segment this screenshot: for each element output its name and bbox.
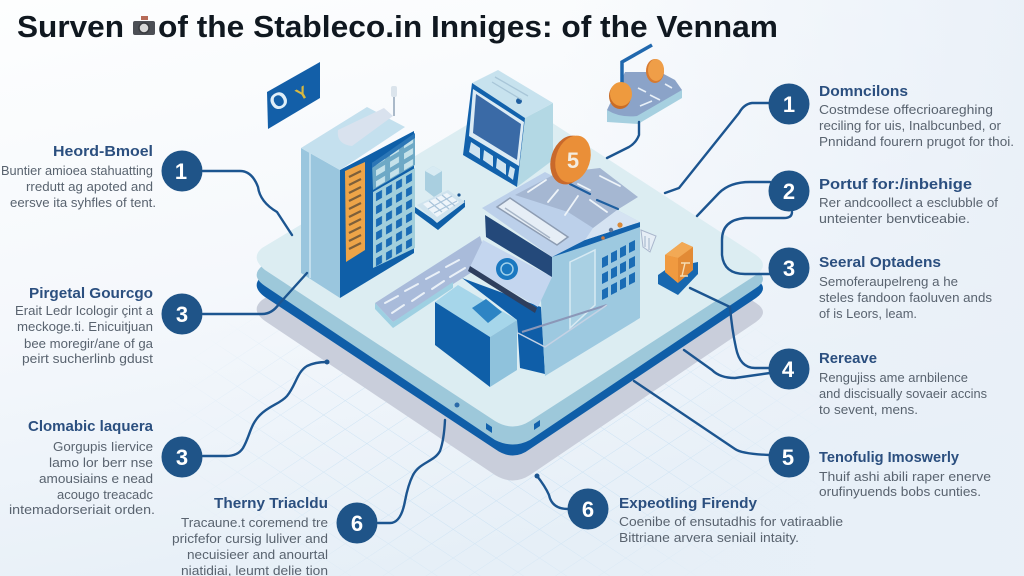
number badge 3	[162, 436, 202, 478]
callout left: Clomabic laquera: intemadorseriait orden.	[9, 503, 155, 517]
callout right: Portuf for:/inbehige: Rer andcoollect a esclubble of	[819, 196, 999, 210]
callout right: Domncilons: Pnnidand fourern prugot for thoi.	[819, 135, 1014, 149]
callout right: Portuf for:/inbehige: Portuf for:/inbehige	[819, 176, 972, 193]
callout right: Rereave	[768, 348, 987, 417]
callout left: Clomabic laquera: acougo treacadc	[57, 488, 153, 502]
callout right: Tenofulig Imoswerly	[768, 436, 991, 499]
callout bottom: Therny Triacldu: pricfefor cursig luliver and	[172, 532, 328, 546]
icon: orange coin	[544, 131, 597, 189]
sign board	[264, 62, 320, 129]
number badge 5: 5	[782, 445, 794, 470]
callout right: Tenofulig Imoswerly: orufinyuends bobs cunties.	[819, 485, 981, 499]
callout right: Rereave: Rereave	[819, 350, 877, 367]
callout left: Pirgetal Gourcgo: Erait Ledr Icologir çint a	[15, 304, 153, 318]
sign board: Y	[292, 82, 312, 104]
number badge 6	[568, 488, 608, 530]
callout bottom: Expeotling Firendy	[568, 488, 843, 545]
callout left: Clomabic laquera	[9, 418, 202, 517]
central machine	[462, 168, 656, 376]
callout left: Pirgetal Gourcgo	[15, 285, 202, 366]
keypad terminal	[415, 166, 465, 230]
orange label	[345, 162, 365, 262]
callout left: Heord-Bmoel: Heord-Bmoel	[53, 143, 153, 160]
callout bottom: Therny Triacldu: Therny Triacldu	[214, 495, 328, 512]
number badge 1	[768, 84, 810, 124]
number badge 4	[768, 348, 810, 390]
callout bottom: Therny Triacldu: necuisieer and anourtal	[187, 548, 328, 562]
icon: coin scale	[607, 45, 682, 124]
callout left: Clomabic laquera: lamo lor berr nse	[49, 456, 153, 470]
callout right: Domncilons	[768, 83, 1014, 149]
number badge 1: 1	[175, 159, 187, 184]
callout right: Seeral Optadens: Seeral Optadens	[819, 254, 941, 271]
callout right: Domncilons: Costmdese offecrioareghing	[819, 103, 993, 117]
callout left: Heord-Bmoel	[1, 143, 202, 210]
title: Surven	[17, 9, 124, 44]
callout left: Clomabic laquera: amousiains e nead	[39, 472, 153, 486]
callout right: Tenofulig Imoswerly: Thuif ashi abili raper enerve	[819, 470, 991, 484]
hanging clip	[641, 230, 656, 252]
number badge 5	[768, 436, 810, 478]
callout right: Seeral Optadens: steles fandoon faoluven ands	[819, 291, 992, 305]
isometric platform	[257, 100, 763, 480]
number badge 3: 3	[176, 445, 188, 470]
tower building	[301, 86, 415, 298]
number badge 1: 1	[783, 92, 795, 117]
drawer box	[435, 285, 517, 387]
number badge 2	[768, 170, 810, 212]
number badge 3	[162, 294, 202, 334]
callout left: Pirgetal Gourcgo: meckoge.ti. Enicuitjuan	[17, 320, 153, 334]
number badge 6: 6	[351, 511, 363, 536]
callout right: Seeral Optadens	[768, 248, 992, 321]
callout left: Clomabic laquera: Clomabic laquera	[28, 418, 154, 435]
callout left: Heord-Bmoel: eersve ita syhfles of tent.	[10, 196, 156, 210]
callout right: Tenofulig Imoswerly: Tenofulig Imoswerly	[819, 449, 960, 466]
control panel	[552, 210, 640, 257]
callout left: Heord-Bmoel: Buntier amioea stahuatting	[1, 164, 153, 178]
callout bottom: Expeotling Firendy: Coenibe of ensutadhis for vatiraablie	[619, 515, 843, 529]
callout right: Portuf for:/inbehige	[768, 170, 999, 226]
icon: orange coin: 5	[567, 148, 579, 173]
callout right: Rereave: and discisually sovaeir accins	[819, 387, 987, 401]
callout bottom: Expeotling Firendy: Bittriane arvera seniail intaity.	[619, 531, 799, 545]
number badge 3: 3	[783, 256, 795, 281]
callout right: Seeral Optadens: of is Leors, leam.	[819, 307, 917, 321]
callout left: Pirgetal Gourcgo: peirt sucherlinb gdust	[22, 352, 154, 366]
window grid	[372, 133, 415, 268]
monitor	[463, 70, 553, 187]
conveyor belt	[375, 236, 488, 328]
output tray	[497, 198, 568, 245]
callout bottom: Therny Triacldu: Tracaune.t coremend tre	[181, 516, 328, 530]
callout bottom: Expeotling Firendy: Expeotling Firendy	[619, 495, 758, 512]
callout right: Seeral Optadens: Semoferaupelreng a he	[819, 275, 958, 289]
callout right: Rereave: to sevent, mens.	[819, 403, 918, 417]
callout bottom: Therny Triacldu	[172, 495, 378, 576]
callout left: Heord-Bmoel: rredutt ag apoted and	[26, 180, 153, 194]
number badge 2: 2	[783, 179, 795, 204]
number badge 1	[162, 150, 202, 192]
number badge 3	[768, 248, 810, 288]
callout right: Domncilons: Domncilons	[819, 83, 908, 100]
sign board: O	[264, 85, 293, 116]
callout right: Portuf for:/inbehige: unteienter benvticeabie.	[819, 212, 970, 226]
title: of the Stableco.in Inniges: of the Vennam	[158, 9, 778, 44]
number badge 6: 6	[582, 497, 594, 522]
number badge 6	[336, 502, 378, 544]
number badge 3: 3	[176, 302, 188, 327]
callout right: Rereave: Rengujiss ame arnbilence	[819, 371, 968, 385]
paper sheet	[515, 168, 638, 228]
number badge 4: 4	[782, 357, 795, 382]
platform ports	[454, 402, 540, 433]
connector lines	[203, 103, 792, 523]
icon: orange cube	[658, 242, 698, 295]
icon: title glyph	[133, 16, 155, 35]
callout right: Domncilons: reciling for uis, Inalbcunbed, or	[819, 119, 1001, 133]
callout left: Pirgetal Gourcgo: Pirgetal Gourcgo	[29, 285, 153, 302]
callout left: Clomabic laquera: Gorgupis Iiervice	[53, 440, 153, 454]
callout left: Pirgetal Gourcgo: bee moregir/ane of ga	[24, 337, 153, 351]
